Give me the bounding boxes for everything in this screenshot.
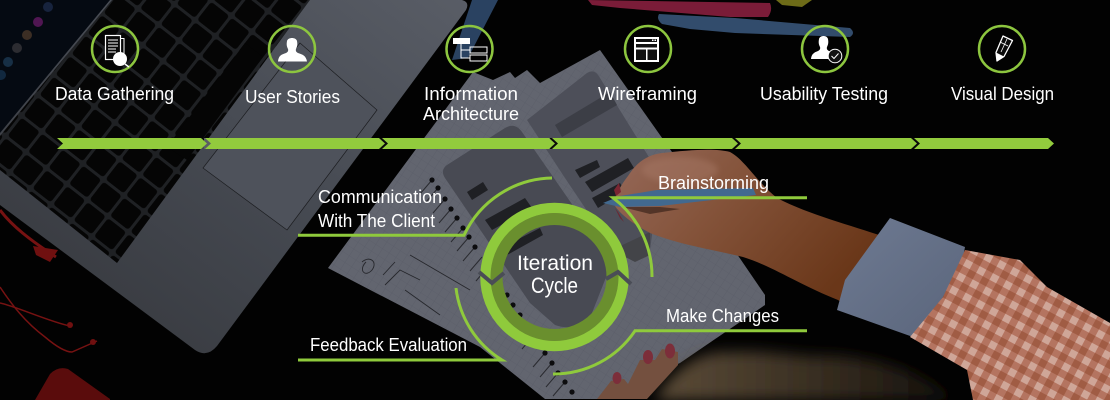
callout: Communication With The Client: With The Client bbox=[318, 211, 435, 231]
shirt cuff bbox=[837, 218, 965, 337]
wireframe phones bbox=[527, 71, 660, 260]
step: Wireframing bbox=[598, 26, 697, 104]
callout: Feedback Evaluation bbox=[298, 288, 502, 360]
iteration cycle ring bbox=[479, 208, 631, 346]
icon: user bbox=[278, 38, 307, 62]
icon: site structure bbox=[453, 38, 487, 61]
laptop screen bbox=[0, 0, 112, 135]
red notebook bbox=[35, 368, 110, 400]
iteration cycle ring: Iteration bbox=[517, 252, 593, 275]
pen in hand bbox=[603, 188, 756, 207]
callout: Communication With The Client bbox=[298, 178, 552, 235]
step: Usability Testing: Usability Testing bbox=[760, 84, 888, 104]
step: Information Architecture: Information bbox=[424, 84, 518, 104]
timeline arrow bar bbox=[57, 138, 1054, 149]
icon: document with magnifier bbox=[106, 36, 129, 67]
icon: wireframe window bbox=[634, 37, 659, 62]
checked sleeve bbox=[910, 250, 1110, 400]
dock icons bbox=[0, 2, 53, 80]
step: Information Architecture bbox=[423, 26, 519, 124]
sketches on paper bbox=[362, 255, 470, 315]
earphone tips bbox=[33, 246, 96, 345]
step: Usability Testing bbox=[760, 26, 888, 104]
step: Data Gathering: Data Gathering bbox=[55, 84, 174, 104]
grey panel under hand bbox=[612, 232, 650, 262]
callout: Make Changes: Make Changes bbox=[666, 306, 779, 326]
step: Wireframing: Wireframing bbox=[598, 84, 697, 104]
trackpad bbox=[203, 43, 377, 230]
laptop body bbox=[0, 0, 467, 353]
step: Information Architecture: Architecture bbox=[423, 104, 519, 124]
red earphones bbox=[0, 210, 97, 352]
lower hand nails bbox=[612, 344, 675, 384]
papers and notebook bbox=[328, 50, 765, 399]
step: Visual Design bbox=[951, 26, 1054, 104]
callout: Communication With The Client: Communication bbox=[318, 187, 442, 207]
step: User Stories: User Stories bbox=[245, 87, 340, 107]
callout: Make Changes bbox=[553, 306, 807, 374]
wireframe bars bbox=[467, 158, 634, 255]
blond hair bbox=[655, 352, 955, 400]
step: User Stories bbox=[245, 26, 340, 107]
icon: pencil bbox=[996, 36, 1012, 61]
icon: user with check badge bbox=[811, 36, 842, 63]
arm and hand bbox=[613, 150, 885, 305]
finger shadow under pen bbox=[622, 207, 680, 214]
blue pen by laptop bbox=[452, 0, 498, 60]
nails bbox=[614, 183, 621, 196]
callout: Brainstorming bbox=[613, 173, 807, 277]
step: Visual Design: Visual Design bbox=[951, 84, 1054, 104]
step: Data Gathering bbox=[55, 26, 174, 104]
spiral binding bbox=[420, 177, 575, 396]
iteration cycle ring: Cycle bbox=[531, 273, 578, 298]
callout: Feedback Evaluation: Feedback Evaluation bbox=[310, 335, 467, 355]
blue pen bbox=[658, 14, 853, 37]
red marker bbox=[588, 0, 771, 17]
timeline panel on wireframe bbox=[555, 92, 617, 137]
lower hand bbox=[597, 349, 678, 399]
yellow marker bbox=[776, 0, 812, 7]
hand highlight bbox=[642, 157, 718, 183]
callout: Brainstorming: Brainstorming bbox=[658, 173, 769, 193]
keyboard bbox=[0, 0, 310, 263]
